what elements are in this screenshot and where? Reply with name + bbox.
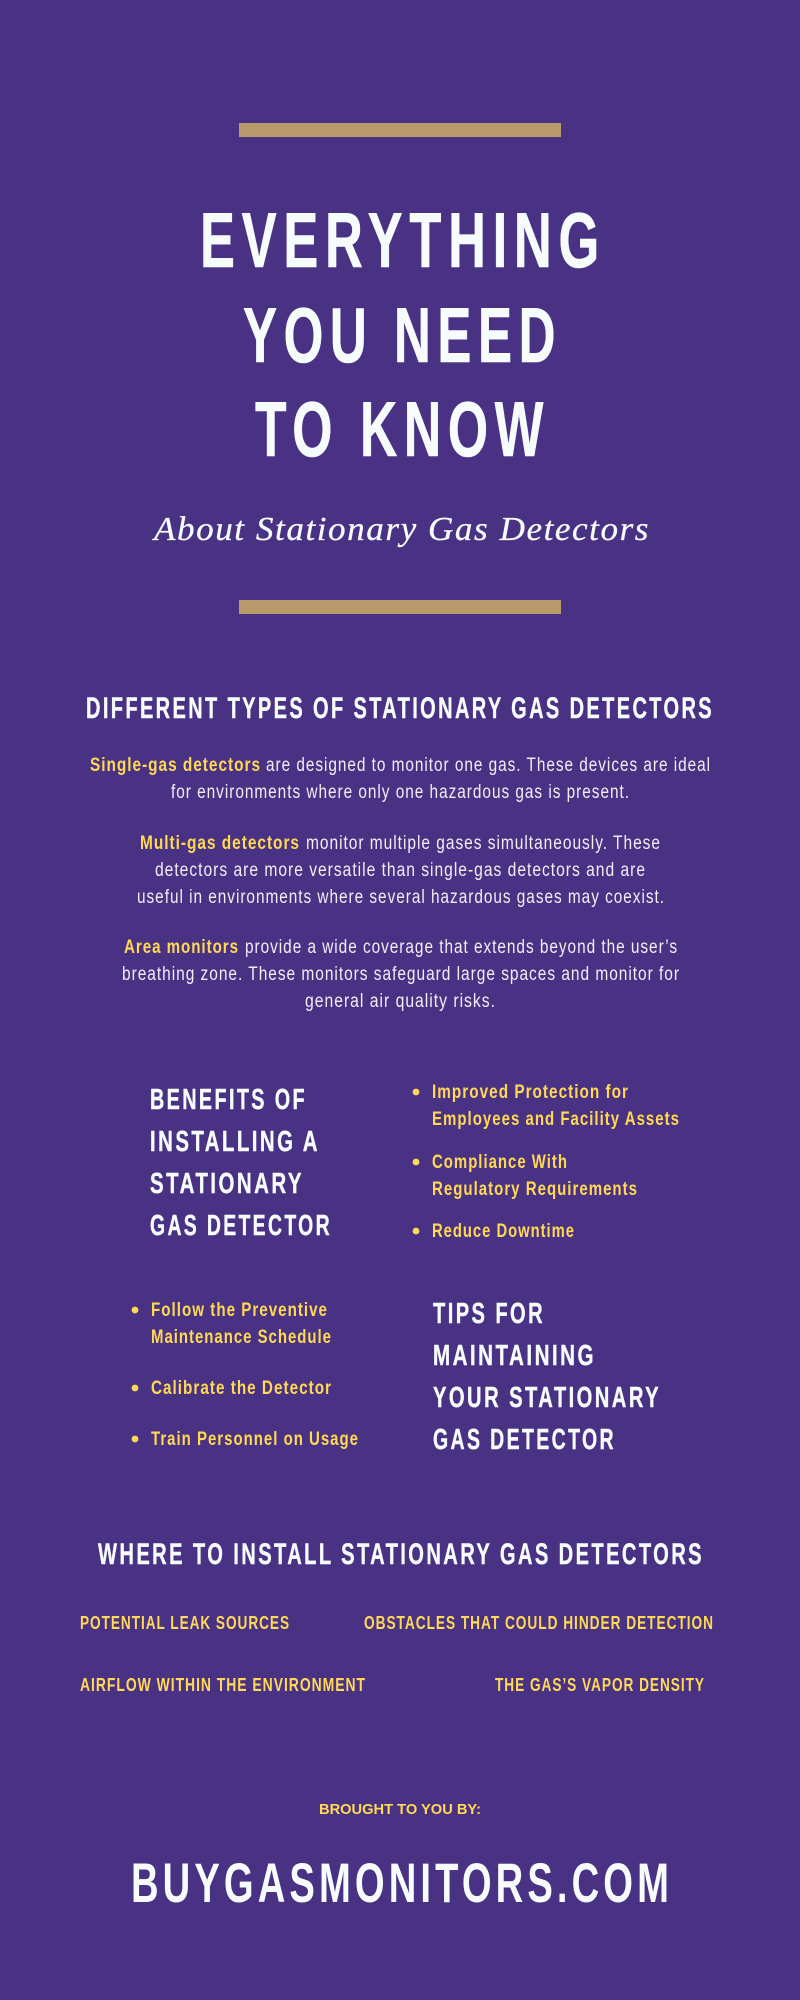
list: benefits: Regulatory Requirements	[432, 1178, 638, 1200]
list: install considerations: AIRFLOW WITHIN THE ENVIRONMENT	[80, 1674, 366, 1695]
title: EVERYTHING	[200, 196, 606, 284]
heading: tips for maintaining: YOUR STATIONARY	[433, 1382, 661, 1414]
text block: multi-gas detectors: useful in environments where several hazardous gases may coexist.	[137, 887, 665, 908]
list: tips: Calibrate the Detector	[151, 1377, 332, 1399]
heading: tips for maintaining: GAS DETECTOR	[433, 1424, 616, 1456]
list: tips	[132, 1299, 359, 1450]
heading: benefits of installing	[150, 1084, 332, 1242]
panel: benefits	[150, 1081, 680, 1242]
list: benefits: Improved Protection for	[432, 1081, 629, 1103]
list: install considerations: POTENTIAL LEAK SOURCES	[80, 1612, 290, 1633]
text block: single-gas detectors: for environments where only one hazardous gas is present.	[171, 782, 630, 803]
list: benefits	[413, 1081, 680, 1242]
heading: tips for maintaining: MAINTAINING	[433, 1340, 596, 1372]
top accent bar	[239, 123, 561, 137]
panel: where to install	[80, 1538, 714, 1695]
text block: multi-gas detectors	[137, 833, 665, 908]
text block: area monitors	[122, 937, 680, 1012]
list: benefits: Compliance With	[432, 1151, 568, 1173]
text block: multi-gas detectors: monitor multiple gases simultaneously. These	[306, 833, 661, 854]
title: TO KNOW	[255, 385, 550, 473]
panel: different types of stationary gas detectors	[86, 692, 714, 1012]
text block: single-gas detectors: Single-gas detectors	[90, 755, 261, 776]
subtitle: About Stationary Gas Detectors	[152, 511, 650, 548]
list: install considerations: THE GAS’S VAPOR DENSITY	[495, 1674, 705, 1695]
text block: multi-gas detectors: Multi-gas detectors	[140, 833, 300, 854]
heading: benefits of installing: BENEFITS OF	[150, 1084, 307, 1116]
heading: tips for maintaining: TIPS FOR	[433, 1298, 545, 1330]
footer label: BROUGHT TO YOU BY:	[319, 1801, 481, 1818]
text block: area monitors: provide a wide coverage that extends beyond the user’s	[245, 937, 678, 958]
list: tips: Train Personnel on Usage	[151, 1428, 359, 1450]
title	[200, 196, 606, 473]
list: tips: Follow the Preventive	[151, 1299, 328, 1321]
heading: benefits of installing: STATIONARY	[150, 1168, 304, 1200]
text block: area monitors: Area monitors	[124, 937, 239, 958]
panel: maintenance tips	[132, 1298, 661, 1456]
text block: area monitors: general air quality risks.	[305, 991, 496, 1012]
list: benefits: Employees and Facility Assets	[432, 1108, 680, 1130]
bottom accent bar	[239, 600, 561, 614]
heading: benefits of installing: GAS DETECTOR	[150, 1210, 332, 1242]
heading: tips for maintaining	[433, 1298, 661, 1456]
list: install considerations	[80, 1612, 714, 1695]
heading: benefits of installing: INSTALLING A	[150, 1126, 320, 1158]
title: YOU NEED	[243, 291, 562, 379]
text block: multi-gas detectors: detectors are more versatile than single-gas detectors and are	[155, 860, 646, 881]
list: benefits: Reduce Downtime	[432, 1220, 575, 1242]
list: tips: Maintenance Schedule	[151, 1326, 332, 1348]
text block: single-gas detectors	[90, 755, 711, 803]
text block: area monitors: breathing zone. These monitors safeguard large spaces and monitor for	[122, 964, 680, 985]
